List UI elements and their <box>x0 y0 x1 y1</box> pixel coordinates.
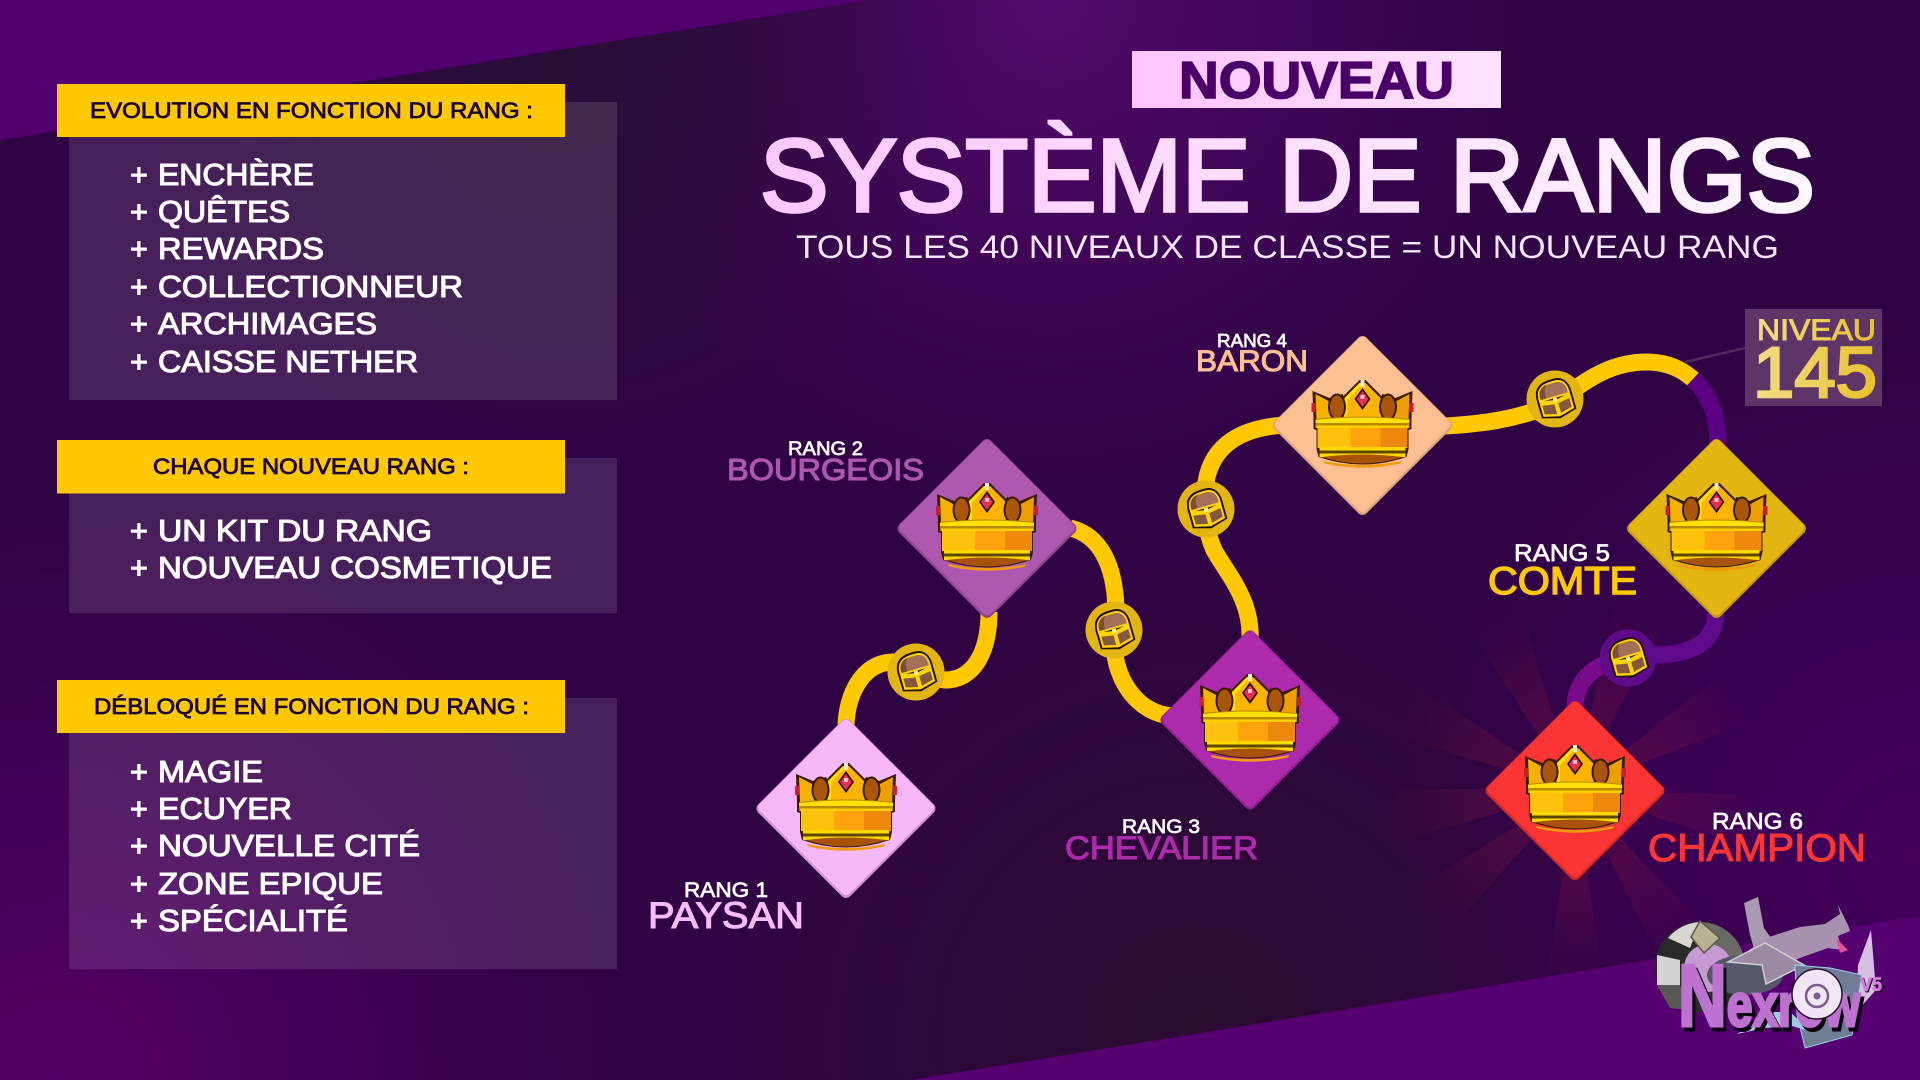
list of features: + <box>130 345 148 379</box>
logo small blue dragon <box>1737 1012 1812 1034</box>
badge: nouveau <box>1132 51 1501 110</box>
list of rewards: UN KIT DU RANG <box>158 514 432 548</box>
list of features <box>130 157 463 379</box>
label: rang 3 chevalier: CHEVALIER <box>1065 830 1258 866</box>
panel header: DÉBLOQUÉ EN FONCTION DU RANG : <box>94 694 529 719</box>
panel background <box>69 458 617 613</box>
panel: chaque nouveau rang <box>57 440 617 613</box>
list of unlocks: + <box>130 867 148 901</box>
list of rewards <box>130 514 552 585</box>
list of unlocks: MAGIE <box>158 755 263 789</box>
label: rang 5 comte: RANG 5 <box>1514 540 1610 567</box>
rank 3 diamond <box>1158 628 1342 812</box>
list of rewards: NOUVEAU COSMETIQUE <box>158 551 552 585</box>
level marker: niveau 145: NIVEAU <box>1757 314 1876 347</box>
rank 1 diamond <box>754 717 938 900</box>
logo wordmark: Nexrow <box>1678 946 1860 1045</box>
logo wing <box>1795 965 1862 1048</box>
panel header: EVOLUTION EN FONCTION DU RANG : <box>90 98 533 123</box>
panel: evolution en fonction du rang <box>57 84 617 400</box>
logo shell ring <box>1655 922 1783 1012</box>
label: rang 6 champion: CHAMPION <box>1648 827 1866 870</box>
label: rang 6 champion <box>1648 808 1866 870</box>
list of unlocks: + <box>130 829 148 863</box>
label: rang 1 paysan: PAYSAN <box>648 895 804 936</box>
label: rang 4 baron: RANG 4 <box>1217 331 1287 351</box>
panel header <box>57 680 565 733</box>
list of features: ENCHÈRE <box>158 157 314 192</box>
list of unlocks: + <box>130 792 148 826</box>
list of unlocks: + <box>130 904 148 938</box>
list of unlocks: + <box>130 755 148 789</box>
list of features: QUÊTES <box>158 194 290 229</box>
logo swirl <box>1792 969 1842 1019</box>
label: rang 3 chevalier <box>1065 817 1258 866</box>
list of unlocks: SPÉCIALITÉ <box>158 903 348 938</box>
rank 5 diamond <box>1625 437 1808 620</box>
progress path: remaining (purple) <box>1575 379 1718 708</box>
chest node 4 <box>1526 370 1584 428</box>
champion sunburst rays <box>1383 602 1767 980</box>
list of rewards: + <box>130 551 148 585</box>
label: rang 5 comte: COMTE <box>1488 560 1637 603</box>
rank 6 diamond <box>1483 699 1667 882</box>
label: rang 5 comte <box>1488 540 1637 603</box>
panel header: CHAQUE NOUVEAU RANG : <box>153 454 469 479</box>
level marker: niveau 145: 145 <box>1753 334 1877 413</box>
panel: débloqué en fonction du rang <box>57 680 617 969</box>
list of features: + <box>130 232 148 266</box>
logo: nexrow v5 <box>1655 897 1882 1048</box>
list of unlocks: ECUYER <box>158 792 292 826</box>
label: rang 4 baron <box>1196 331 1308 378</box>
label: rang 3 chevalier: RANG 3 <box>1122 817 1200 838</box>
bottom-right purple wedge <box>912 916 1920 1080</box>
label: rang 6 champion: RANG 6 <box>1712 808 1803 834</box>
list of unlocks: ZONE EPIQUE <box>158 867 383 901</box>
chest node 3 <box>1178 480 1234 538</box>
logo version: V5 <box>1860 975 1882 996</box>
chest node 2 <box>1086 602 1142 658</box>
panel header <box>57 440 565 494</box>
chest node 5 <box>1600 630 1656 686</box>
panel header <box>57 84 565 137</box>
title: SYSTÈME DE RANGS <box>760 118 1815 233</box>
rank 4 diamond <box>1271 334 1454 517</box>
label: rang 4 baron: BARON <box>1196 345 1308 378</box>
list of unlocks <box>130 755 420 938</box>
list of features: ARCHIMAGES <box>158 307 377 341</box>
level marker: niveau 145 <box>1685 309 1882 413</box>
label: rang 1 paysan: RANG 1 <box>684 879 768 902</box>
subtitle: TOUS LES 40 NIVEAUX DE CLASSE = UN NOUVEAU RANG <box>796 229 1779 265</box>
list of features: CAISSE NETHER <box>158 345 418 379</box>
top-left purple wedge <box>0 0 868 140</box>
chest node 1 <box>888 644 944 700</box>
list of rewards: + <box>130 514 148 548</box>
label: rang 1 paysan <box>648 879 804 936</box>
label: rang 2 bourgeois: RANG 2 <box>788 439 863 460</box>
rank 2 diamond <box>895 437 1079 620</box>
logo spike <box>1856 930 1876 1012</box>
list of unlocks: NOUVELLE CITÉ <box>158 828 420 863</box>
list of features: REWARDS <box>158 232 324 266</box>
logo dragon <box>1728 897 1850 984</box>
label: rang 2 bourgeois: BOURGEOIS <box>727 452 924 487</box>
panel background <box>69 698 617 969</box>
panel background <box>69 102 617 400</box>
list of features: + <box>130 195 148 229</box>
progress path: completed (yellow) <box>846 362 1696 725</box>
badge: nouveau: NOUVEAU <box>1179 52 1454 110</box>
list of features: + <box>130 307 148 341</box>
list of features: + <box>130 158 148 192</box>
list of features: COLLECTIONNEUR <box>158 270 463 304</box>
list of features: + <box>130 270 148 304</box>
logo crystal <box>1691 921 1720 953</box>
label: rang 2 bourgeois <box>727 439 924 487</box>
